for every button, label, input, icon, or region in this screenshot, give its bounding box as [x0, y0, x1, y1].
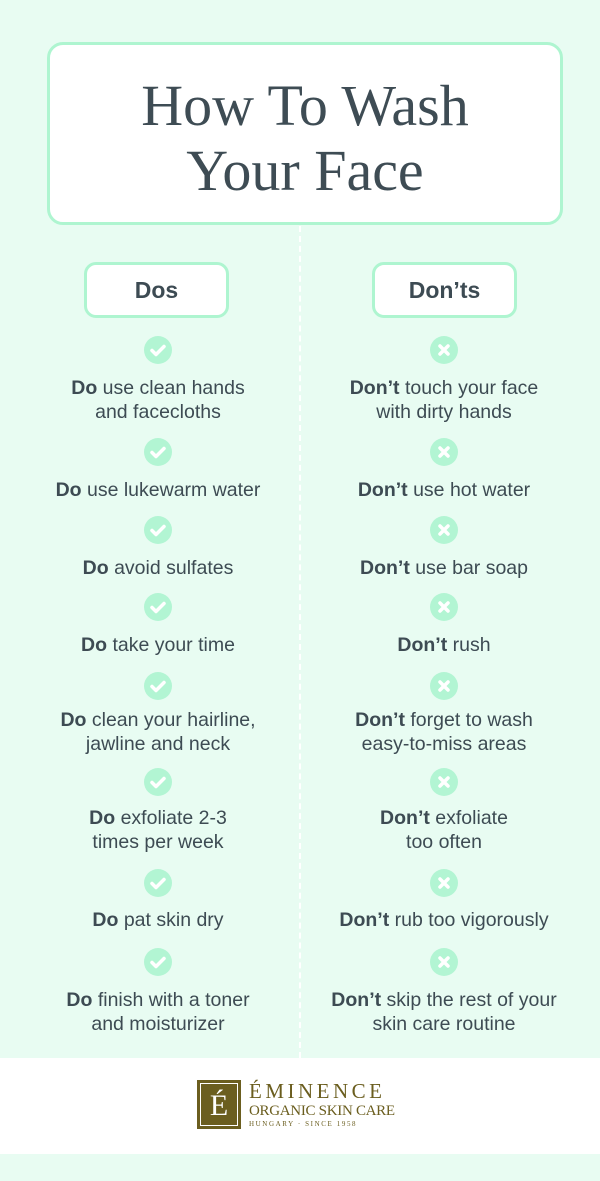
- text: don't 1: with dirty hands: [376, 401, 512, 423]
- text: do 5: Do clean your hairline,: [60, 709, 256, 731]
- icon: cross: [430, 593, 458, 621]
- text: don't 8: Don’t skip the rest of your: [331, 989, 557, 1011]
- text: don't 4: Don’t rush: [397, 634, 491, 656]
- text: do 1: [71, 377, 245, 423]
- icon: cross: [430, 672, 458, 700]
- icon: cross: [430, 948, 458, 976]
- text: don't 8: skin care routine: [372, 1013, 516, 1035]
- text: don't 3: Don’t use bar soap: [360, 557, 528, 579]
- heading: dos: Dos: [135, 277, 178, 303]
- text: do 8: [66, 989, 250, 1035]
- logo text: HUNGARY · SINCE 1958: [249, 1120, 357, 1128]
- text: do 5: [60, 709, 256, 755]
- logo: [197, 1079, 395, 1129]
- title: How To Wash: [141, 73, 469, 138]
- footer band: [0, 1058, 600, 1154]
- text: don't 5: easy-to-miss areas: [362, 733, 526, 755]
- icon: check: [144, 516, 172, 544]
- icon: cross: [430, 768, 458, 796]
- text: don't 5: [355, 709, 533, 755]
- icon: cross: [430, 336, 458, 364]
- icon: check: [144, 438, 172, 466]
- column: don'ts: [331, 336, 557, 1035]
- text: don't 8: [331, 989, 557, 1035]
- text: do 7: Do pat skin dry: [92, 909, 224, 931]
- logo text: ORGANIC SKIN CARE: [249, 1103, 395, 1119]
- icon: check: [144, 869, 172, 897]
- text: don't 1: [350, 377, 538, 423]
- text: do 6: [89, 807, 227, 853]
- heading: dos: [84, 262, 229, 318]
- text: do 1: and facecloths: [95, 401, 221, 423]
- text: do 4: Do take your time: [81, 634, 235, 656]
- title: Your Face: [186, 138, 424, 203]
- icon: check: [144, 948, 172, 976]
- heading: don'ts: [372, 262, 517, 318]
- icon: logo mark: [197, 1080, 241, 1129]
- icon: check: [144, 593, 172, 621]
- text: do 6: times per week: [92, 831, 224, 853]
- icon: check: [144, 336, 172, 364]
- text: don't 1: Don’t touch your face: [350, 377, 538, 399]
- logo text: ÉMINENCE: [249, 1079, 386, 1103]
- text: don't 6: [380, 807, 508, 853]
- text: do 6: Do exfoliate 2-3: [89, 807, 227, 829]
- text: don't 6: too often: [406, 831, 482, 853]
- text: don't 2: Don’t use hot water: [358, 479, 530, 501]
- text: do 5: jawline and neck: [86, 733, 230, 755]
- text: do 2: Do use lukewarm water: [56, 479, 260, 501]
- icon: check: [144, 768, 172, 796]
- icon: cross: [430, 516, 458, 544]
- text: do 3: Do avoid sulfates: [83, 557, 233, 579]
- icon: cross: [430, 438, 458, 466]
- icon: check: [144, 672, 172, 700]
- title: [47, 42, 563, 225]
- heading: don'ts: Don’ts: [409, 277, 480, 303]
- text: do 1: Do use clean hands: [71, 377, 245, 399]
- icon: cross: [430, 869, 458, 897]
- text: do 8: Do finish with a toner: [66, 989, 250, 1011]
- text: do 8: and moisturizer: [91, 1013, 225, 1035]
- text: don't 5: Don’t forget to wash: [355, 709, 533, 731]
- logo text: [249, 1079, 395, 1128]
- text: don't 7: Don’t rub too vigorously: [339, 909, 549, 931]
- text: don't 6: Don’t exfoliate: [380, 807, 508, 829]
- column: dos: [56, 336, 260, 1035]
- icon: logo mark: É: [210, 1089, 228, 1122]
